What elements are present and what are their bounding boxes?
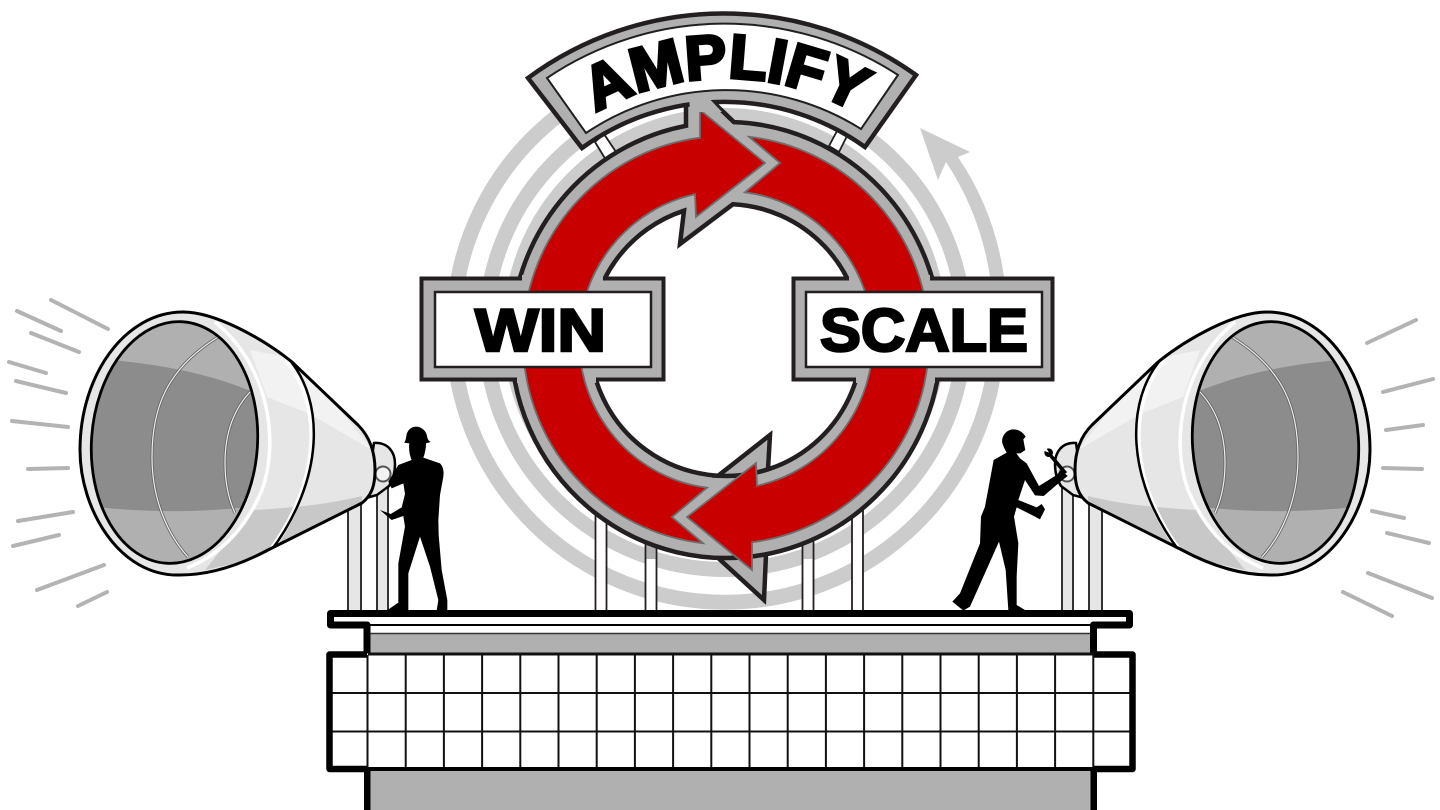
sign support posts	[595, 131, 863, 611]
right worker silhouette with wrench	[952, 429, 1068, 611]
win label: WIN	[475, 297, 606, 364]
circular arrow frame	[511, 80, 941, 600]
amplify arched sign	[524, 11, 920, 152]
win label	[435, 292, 651, 367]
scale sign frame	[794, 275, 1052, 383]
amplify arched sign: AMPLIFY	[591, 33, 878, 114]
wrench	[1044, 448, 1066, 473]
concentric gray sound rings with arrow	[453, 90, 1004, 602]
rooftop platform	[330, 614, 1130, 655]
arrowhead on outer ring	[920, 128, 1004, 330]
left sound lines	[9, 300, 108, 606]
left worker silhouette	[380, 427, 447, 611]
right sound lines	[1343, 320, 1433, 616]
scale label: SCALE	[820, 297, 1028, 364]
red arrow: left segment	[523, 110, 765, 543]
right speaker	[1055, 312, 1370, 612]
tiled building facade	[330, 654, 1132, 770]
lower building wall	[364, 768, 1097, 810]
left speaker	[80, 312, 395, 612]
red arrow: right segment	[687, 137, 929, 570]
win sign frame	[422, 275, 664, 383]
